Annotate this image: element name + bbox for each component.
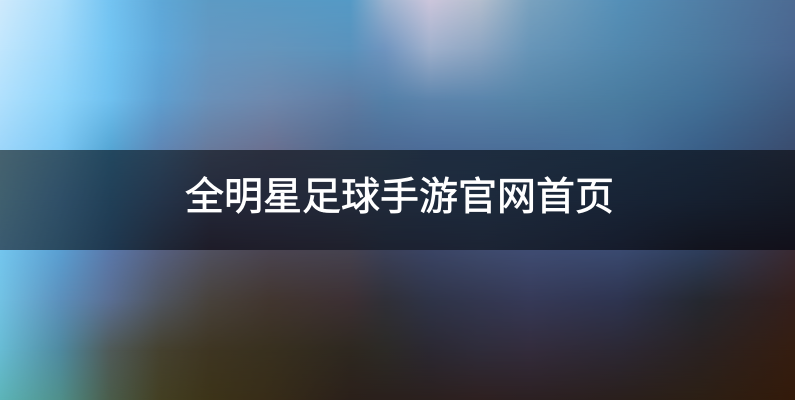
title: 全明星足球手游官网首页 [185, 176, 614, 219]
blurred background: lower area [0, 250, 795, 400]
blurred background: upper area [0, 0, 795, 150]
dark title band [0, 150, 795, 250]
